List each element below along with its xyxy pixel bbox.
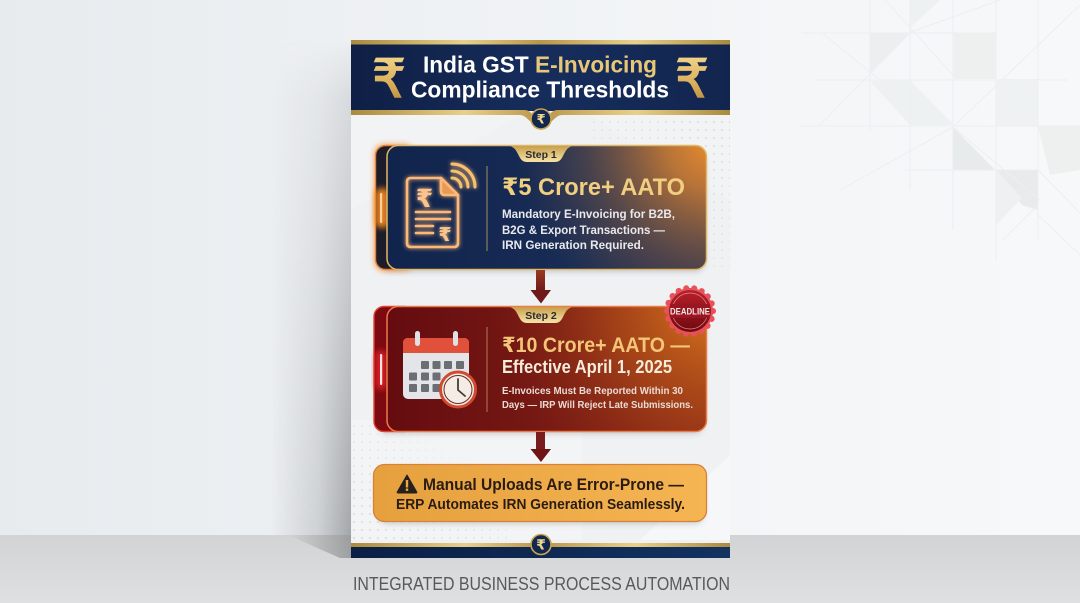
- header banner: [351, 40, 730, 130]
- footer medallion: [531, 534, 551, 554]
- divider: [486, 327, 488, 412]
- step 1 tab: [510, 146, 572, 162]
- card 1 shadow: [380, 150, 705, 272]
- callout text: Manual Uploads Are Error-Prone —: [423, 475, 684, 494]
- card 1 warm overlay: [387, 146, 706, 270]
- step 2 heading: [502, 334, 690, 377]
- step 2 body: E-Invoices Must Be Reported Within 30: [502, 385, 683, 397]
- floor: [0, 535, 1080, 603]
- deadline badge: [667, 288, 713, 334]
- poster: [351, 40, 730, 558]
- footer band: [351, 534, 730, 558]
- geometric wall pattern: [800, 0, 1080, 260]
- card 2 face: [387, 306, 706, 432]
- poster shadow: [281, 60, 351, 558]
- callout text: [396, 475, 685, 513]
- card 2 side light: [380, 354, 382, 385]
- deadline badge: DEADLINE: [670, 306, 710, 316]
- card 2 back layer: [374, 306, 414, 432]
- icon: rupee left: ₹: [372, 50, 406, 109]
- card 1 outer glow: [374, 144, 414, 271]
- step 1 body: Mandatory E-Invoicing for B2B,: [502, 207, 675, 221]
- card 1 face: [387, 146, 706, 270]
- card 2 shadow: [378, 312, 704, 434]
- title: India GST E-Invoicing: [423, 52, 657, 78]
- step 1 tab: Step 1: [525, 149, 557, 161]
- panel: step 2: [374, 288, 713, 434]
- step 2 body: [502, 385, 693, 411]
- icon: e-invoice document: ₹: [438, 225, 452, 246]
- step 2 tab: Step 2: [525, 310, 557, 322]
- callout shadow: [378, 470, 704, 524]
- arrow 2: [530, 432, 551, 462]
- callout box: [374, 464, 706, 522]
- icon: calendar with clock: [403, 331, 476, 407]
- title: [411, 52, 669, 102]
- icon: e-invoice document: [407, 164, 475, 247]
- icon: e-invoice document: ₹: [416, 185, 433, 213]
- step 1 heading: ₹5 Crore+ AATO: [502, 174, 685, 201]
- step 2 tab: [510, 307, 572, 323]
- icon: rupee right: ₹: [675, 50, 709, 109]
- panel: step 1: [374, 144, 706, 272]
- step 2 heading: Effective April 1, 2025: [502, 356, 672, 377]
- title: Compliance Thresholds: [411, 76, 669, 102]
- card 1 bar glow: [375, 188, 389, 228]
- card 2 bar glow: [375, 350, 387, 390]
- card 1 side light: [380, 193, 382, 223]
- step 1 body: [502, 207, 675, 252]
- medallion: [531, 109, 551, 129]
- callout text: ERP Automates IRN Generation Seamlessly.: [396, 496, 685, 513]
- step 2 heading: ₹10 Crore+ AATO —: [502, 334, 690, 357]
- arrow 1: [530, 270, 551, 304]
- poster sheet: [351, 40, 730, 558]
- caption: INTEGRATED BUSINESS PROCESS AUTOMATION: [353, 574, 730, 594]
- step 1 body: IRN Generation Required.: [502, 238, 644, 252]
- step 2 body: Days — IRP Will Reject Late Submissions.: [502, 399, 693, 411]
- step 1 body: B2G & Export Transactions —: [502, 223, 665, 237]
- footer medallion: ₹: [536, 536, 546, 552]
- panel: callout: [374, 464, 706, 524]
- icon: warning triangle: [397, 475, 417, 493]
- card 2 warm overlay: [387, 306, 706, 432]
- card 1 back layer: [376, 146, 416, 270]
- divider: [486, 166, 488, 251]
- medallion: ₹: [536, 112, 546, 126]
